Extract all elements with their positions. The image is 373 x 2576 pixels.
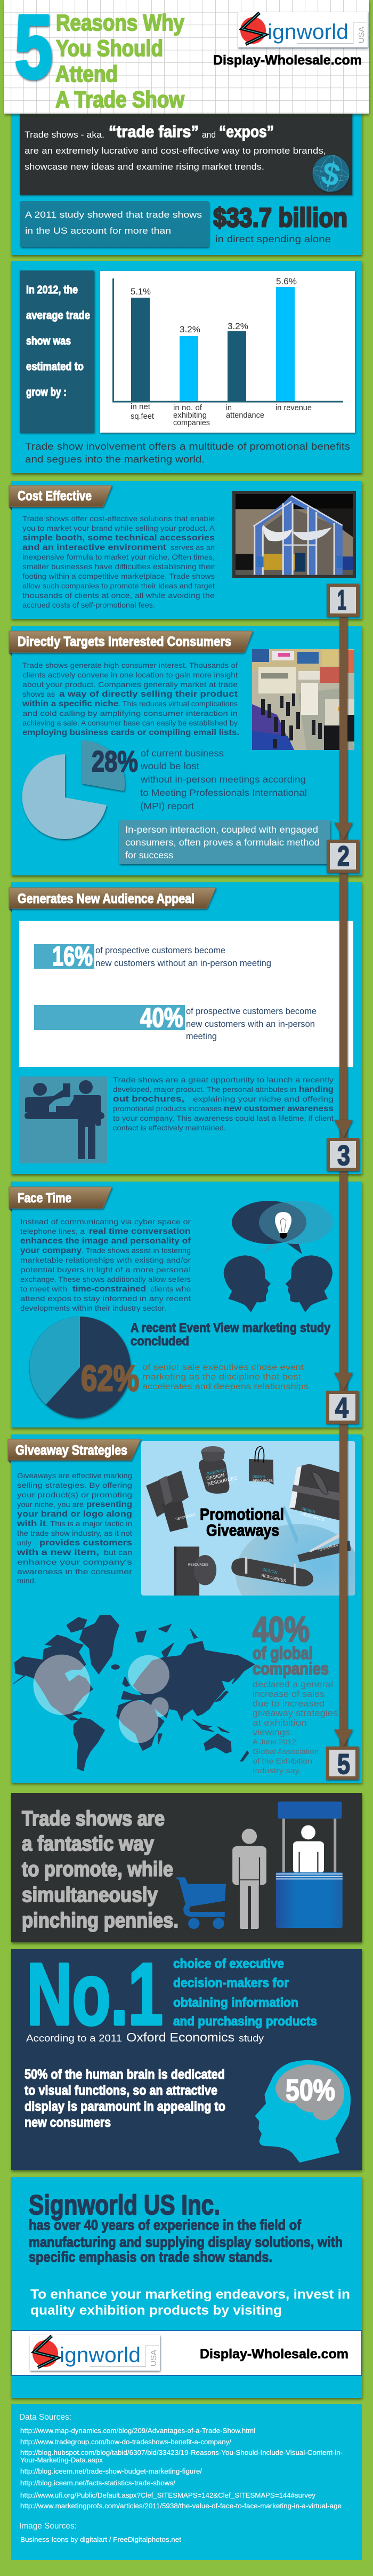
promotional giveaways label: Promotional xyxy=(200,1505,284,1524)
icon: light bulb xyxy=(275,1212,291,1239)
text: cost effective: Trade shows offer cost-effective solutions that enable xyxy=(22,514,215,523)
panel: sources xyxy=(11,2404,362,2560)
website name footer: Display-Wholesale.com xyxy=(200,2347,348,2362)
growth summary text: Trade show involvement offers a multitude of promotional benefits xyxy=(25,441,350,452)
item branding: RESOURCES xyxy=(175,1513,196,1521)
item branding: DESIGN xyxy=(206,1472,225,1481)
title text xyxy=(55,10,184,113)
text: directly targets: about your product. Companies generally market at trade xyxy=(22,680,238,689)
number marker 3: 3 xyxy=(337,1140,350,1171)
pinching pennies heading: Trade shows are xyxy=(22,1807,165,1830)
stat: 40 percent of global companies: viewings xyxy=(253,1727,290,1737)
text: giveaway strategies: . This is a major tactic in xyxy=(46,1519,132,1528)
text: cost effective: footing within a competitive marketplace. Trade shows xyxy=(22,572,215,580)
globe backdrop xyxy=(236,1524,355,1596)
promo item: notebook and disc xyxy=(174,1546,216,1597)
company heading: Signworld US Inc. xyxy=(29,2190,220,2221)
bar chart: 5.6% xyxy=(276,276,297,286)
bar: 40 percent: meeting xyxy=(186,1032,217,1041)
icon: dollar globe: $ xyxy=(318,155,344,194)
number marker 2: 2 xyxy=(337,841,350,872)
brain fact text: 50% of the human brain is dedicated xyxy=(25,2067,225,2082)
stat: No.1: No.1 xyxy=(27,1945,163,2043)
pinching pennies heading: simultaneously xyxy=(22,1884,158,1907)
growth heading box: grow by : xyxy=(26,386,67,398)
icon: visitor figure xyxy=(232,1829,266,1929)
promo item: bag xyxy=(249,1447,273,1485)
stat: 40 percent of global companies: increase of sales xyxy=(253,1689,325,1699)
intro dark box: showcase new ideas and examine rising market trends. xyxy=(25,162,264,172)
text: face time: attend expos to stay informed in any recent xyxy=(20,1294,191,1303)
number marker 4 xyxy=(326,1391,359,1424)
text: directly targets: within a specific niche xyxy=(22,699,118,708)
number marker 1: 1 xyxy=(337,585,346,616)
photo: exhibition booth xyxy=(232,491,356,578)
logo: Signworld USA: USA xyxy=(357,27,366,43)
stat: 33.7 billion xyxy=(213,203,347,244)
study heading xyxy=(131,1321,331,1349)
item branding: RESOURCES xyxy=(261,1573,287,1583)
stat: 28 percent lost: would be lost xyxy=(140,761,199,771)
text: face time: telephone lines, a xyxy=(20,1227,85,1235)
text: giveaway strategies: presenting xyxy=(86,1500,132,1509)
arrow to 2 xyxy=(334,823,353,839)
stat: 62 percent: 62% xyxy=(81,1358,139,1399)
text: cost effective: allow such companies to promote their ideas and target xyxy=(22,581,215,590)
text: directly targets: employing business cards or compiling email lists. xyxy=(22,728,239,737)
stat: 40 percent of global companies: declared a general xyxy=(253,1679,333,1689)
text: directly targets: clients actively convene in one location to gain more insight xyxy=(22,671,238,679)
icon: dollar globe xyxy=(312,154,350,194)
item branding: GRAPHIC xyxy=(206,1468,226,1477)
intro dark box: and xyxy=(202,130,216,140)
Oxford Economics citation: Oxford Economics xyxy=(126,2030,234,2044)
text: new audience: contact is effectively maintained. xyxy=(113,1123,226,1132)
stat: 40 percent of global companies: 40% xyxy=(253,1609,310,1649)
number marker 1 xyxy=(327,584,359,617)
bar chart: sq.feet xyxy=(131,412,154,421)
text: new audience: to your company. This awareness could last a lifetime, if client xyxy=(113,1114,334,1122)
intro dark box xyxy=(20,107,352,195)
pie chart: 28 percent xyxy=(22,740,125,839)
growth summary text xyxy=(25,441,350,465)
stat: 40 percent of global companies xyxy=(253,1609,338,1775)
website name: Display-Wholesale.com xyxy=(213,53,362,68)
growth heading box: In 2012, the xyxy=(26,284,78,296)
text: face time: time-constrained xyxy=(72,1285,146,1294)
item branding: DESIGN xyxy=(301,1507,315,1514)
panel: face time xyxy=(9,1182,362,1427)
image sources: Business Icons by digitalart / FreeDigitalphotos.net xyxy=(20,2536,182,2543)
header xyxy=(4,0,369,114)
text: new audience: explaining your niche and offering xyxy=(193,1095,334,1103)
stat: 28 percent lost: without in-person meetings according xyxy=(140,774,306,785)
bar: 16 percent xyxy=(34,941,271,971)
logo: Signworld USA footer: ignworld xyxy=(60,2343,141,2367)
bar: 40 percent xyxy=(34,1002,317,1041)
text: giveaway strategies: enhance your company's xyxy=(17,1558,132,1566)
stat: 28 percent lost xyxy=(92,745,307,811)
call to action: To enhance your marketing endeavors, invest in xyxy=(30,2287,350,2302)
text: new audience: promotional products increases xyxy=(113,1104,222,1113)
number marker 4: 4 xyxy=(335,1392,348,1424)
panel: cost effective xyxy=(9,481,362,619)
text: new audience: Trade shows are a great opportunity to launch a recently xyxy=(113,1075,334,1084)
stat: 40 percent of global companies: due to increased xyxy=(253,1698,325,1709)
bar chart: in no. of xyxy=(173,404,202,412)
promotional giveaways artwork xyxy=(141,1441,355,1596)
data sources: http://www.marketingprofs.com/articles/2011/5938/the-value-of-face-to-face-marketing-in-a-virtual-age xyxy=(20,2502,342,2510)
text: giveaway strategies: but can xyxy=(104,1548,132,1557)
text: directly targets: and cold calling by amplifying consumer interaction in xyxy=(22,709,238,717)
study heading: concluded xyxy=(131,1334,189,1349)
callout: in-person interaction xyxy=(119,820,330,864)
Oxford Economics citation: study xyxy=(239,2033,264,2044)
text: giveaway strategies: your product(s) or promoting xyxy=(17,1490,132,1499)
bar: 16 percent: new customers without an in-person meeting xyxy=(95,959,271,968)
intro dark box: “expos” xyxy=(219,122,274,141)
text: face time: real time conversation xyxy=(89,1227,191,1236)
callout: in-person interaction: consumers, often proves a formulaic method xyxy=(125,837,320,848)
text: face time: . Trade shows assist in fostering xyxy=(82,1246,191,1255)
image sources: Image Sources: xyxy=(19,2522,77,2531)
growth heading box: estimated to xyxy=(26,361,84,373)
arrow to 4 xyxy=(334,1373,353,1390)
ribbon heading: cost effective: Cost Effective xyxy=(18,489,92,504)
bar: 16 percent: 16% xyxy=(52,941,93,971)
title text: Attend xyxy=(55,61,118,87)
text: cost effective: thousands of clients at once, all while avoiding the xyxy=(22,591,215,600)
icon: head with brain 50 percent xyxy=(255,2060,351,2163)
text: face time: exchange. These shows additionally allow sellers xyxy=(20,1275,191,1283)
number marker 3 xyxy=(327,1138,359,1171)
ribbon heading: face time: Face Time xyxy=(18,1191,71,1206)
Oxford Economics citation: According to a 2011 xyxy=(26,2033,122,2044)
promotional giveaways label xyxy=(200,1505,284,1540)
promo item: bottle xyxy=(199,1446,229,1494)
item branding: DESIGN xyxy=(262,1567,278,1575)
item branding xyxy=(175,1468,338,1583)
Oxford Economics citation xyxy=(26,2030,264,2044)
pinching pennies heading: a fantastic way xyxy=(22,1832,154,1855)
panel: directly targets interested consumers xyxy=(9,626,362,875)
stat: 28 percent lost: 28% xyxy=(92,745,138,778)
icon: head with brain 50 percent: 50% xyxy=(286,2073,335,2107)
panel: pinching pennies xyxy=(11,1793,362,1942)
bar chart: companies xyxy=(173,419,210,427)
text: face time xyxy=(20,1217,191,1312)
stat: 40 percent of global companies: Industry say. xyxy=(253,1766,301,1775)
ribbon heading: giveaway strategies xyxy=(8,1439,141,1464)
image sources xyxy=(19,2522,182,2543)
bar chart: in revenue xyxy=(275,404,312,412)
item branding: DESIGN xyxy=(253,1476,265,1479)
data sources: http://www.tradegroup.com/how-do-tradeshows-benefit-a-company/ xyxy=(20,2438,232,2446)
data sources: http://blog.hubspot.com/blog/tabid/6307/bid/33423/19-Reasons-You-Should-Include-Visual-Content-in- xyxy=(20,2449,343,2457)
text: giveaway strategies: your niche, you are xyxy=(17,1500,84,1509)
stat: 28 percent lost: (MPI) report xyxy=(140,801,194,811)
logo: Signworld USA footer xyxy=(30,2335,160,2371)
pinching pennies heading xyxy=(22,1807,179,1932)
bar chart: in xyxy=(226,404,232,412)
panel: 2012 growth xyxy=(11,261,362,473)
water stream xyxy=(282,1505,298,1544)
logo: Signworld USA footer: USA xyxy=(149,2350,158,2366)
pinching pennies heading: to promote, while xyxy=(22,1858,173,1881)
text: cost effective: simple booth, some technical accessories xyxy=(22,533,215,543)
text: cost effective: smaller businesses have difficulties establishing their xyxy=(22,562,215,571)
text: cost effective: inexpensive formula to market your niche. Often times, xyxy=(22,553,215,561)
item branding: RESOURCES xyxy=(301,1512,325,1522)
text: face time: developments within their industry sector. xyxy=(20,1304,166,1312)
bar chart: in net xyxy=(131,403,150,411)
data sources xyxy=(19,2413,343,2510)
text: directly targets: a way of directly selling their product xyxy=(59,690,238,699)
text: giveaway strategies: Giveaways are effective marking xyxy=(17,1471,132,1480)
text: cost effective xyxy=(22,514,215,609)
stat: 62 percent xyxy=(81,1358,309,1399)
text: face time: potential buyers in light of a more personal xyxy=(20,1265,191,1274)
ribbon heading: face time xyxy=(9,1187,112,1212)
text: face time: enhances the image and personality of xyxy=(20,1237,191,1246)
ribbon heading: new audience: Generates New Audience Appeal xyxy=(18,891,194,906)
promo item: gift box xyxy=(289,1464,339,1520)
bar: 40 percent: new customers with an in-person xyxy=(186,1019,315,1029)
text: new audience: handing xyxy=(299,1085,334,1094)
company heading: has over 40 years of experience in the field of xyxy=(29,2217,302,2233)
brain fact text: to visual functions, so an attractive xyxy=(25,2083,217,2098)
study heading: A recent Event View marketing study xyxy=(131,1321,331,1335)
stat: 40 percent of global companies: of the Exhibition xyxy=(253,1757,312,1765)
ribbon heading: new audience xyxy=(9,888,216,912)
brain fact text xyxy=(25,2067,225,2130)
No.1 description xyxy=(173,1957,317,2029)
panel: number one choice xyxy=(11,1945,362,2170)
website strip xyxy=(11,2331,362,2375)
text: face time: clients who xyxy=(150,1285,191,1293)
bar: 40 percent: 40% xyxy=(140,1002,183,1033)
bar: 40 percent: of prospective customers become xyxy=(186,1007,317,1016)
text: directly targets: shows as xyxy=(22,690,55,698)
bar chart: 3.2% xyxy=(180,324,200,334)
text: cost effective: you to market your brand while selling your product. A xyxy=(22,524,215,532)
promotional giveaways label: Giveaways xyxy=(206,1521,279,1540)
stat: 40 percent of global companies: of global xyxy=(253,1644,313,1663)
arrow to 5 xyxy=(334,1729,353,1746)
numbered timeline post and arrows xyxy=(334,617,353,1746)
promo item: skateboard xyxy=(231,1557,313,1586)
brain fact text: new consumers xyxy=(25,2115,111,2130)
text: giveaway strategies: your brand or logo along xyxy=(17,1510,132,1519)
text: directly targets: Trade shows generate high consumer interest. Thousands of xyxy=(22,661,238,669)
arrow to 3 xyxy=(334,1120,353,1137)
text: cost effective: serves as an xyxy=(171,543,215,552)
text: giveaway strategies xyxy=(17,1471,132,1585)
item branding: RESOURCES xyxy=(188,1564,208,1567)
number marker 2 xyxy=(327,840,359,873)
data sources: Data Sources: xyxy=(19,2413,71,2422)
bar chart xyxy=(100,271,355,433)
intro dark box: are an extremely lucrative and cost-effective way to promote brands, xyxy=(25,146,326,156)
title text: You Should xyxy=(56,36,163,61)
ribbon heading: directly targets: Directly Targets Interested Consumers xyxy=(18,634,231,649)
growth summary text: and segues into the marketing world. xyxy=(25,453,205,465)
stat: 33.7 billion: $33.7 billion xyxy=(213,203,347,233)
title text: Reasons Why xyxy=(56,10,184,36)
comparison chart xyxy=(19,921,353,1067)
data sources: http://blog.iceem.net/trade-show-budget-marketing-figure/ xyxy=(20,2468,202,2475)
text: giveaway strategies: mind. xyxy=(17,1576,36,1585)
text: giveaway strategies: selling strategies. By offering xyxy=(17,1481,132,1489)
text: face time: your company xyxy=(20,1246,82,1255)
ribbon heading: cost effective xyxy=(9,485,112,511)
text: giveaway strategies: the trade show industry, as it not xyxy=(17,1529,132,1537)
stat: 62 percent: of senior sale executives chose event xyxy=(142,1363,304,1372)
stat: 40 percent of global companies: at exhibition xyxy=(253,1718,307,1728)
text: cost effective: accrued costs of self-promotional fees. xyxy=(22,601,155,609)
number marker 5: 5 xyxy=(337,1749,350,1780)
logo: Signworld USA: ignworld xyxy=(267,20,348,44)
call to action: quality exhibition products by visiting xyxy=(30,2303,282,2318)
text: cost effective: and an interactive environment xyxy=(22,543,166,552)
logo: Signworld USA xyxy=(238,12,368,47)
stat: 62 percent: marketing as the discipline that best xyxy=(142,1373,302,1382)
panel: Signworld company xyxy=(11,2177,362,2398)
ribbon heading: directly targets xyxy=(9,631,253,656)
stat: 62 percent: accelerates and deepens relationships xyxy=(142,1382,309,1391)
stat: 28 percent lost: to Meeting Professionals International xyxy=(140,787,307,798)
growth heading box: average trade xyxy=(26,309,90,322)
text: new audience: out brochures, xyxy=(113,1095,184,1104)
call to action xyxy=(30,2287,350,2318)
growth heading box: show was xyxy=(26,335,71,347)
icon: exhibition stand xyxy=(276,1801,343,1928)
callout: 2011 study xyxy=(20,201,209,247)
panel: giveaway strategies xyxy=(8,1434,362,1783)
company heading: specific emphasis on trade show stands. xyxy=(29,2249,272,2265)
data sources: http://www.map-dynamics.com/blog/209/Advantages-of-a-Trade-Show.html xyxy=(20,2427,255,2435)
callout: 2011 study: A 2011 study showed that trade shows xyxy=(25,210,202,220)
item branding: RESOURCES xyxy=(253,1480,273,1483)
text: new audience xyxy=(113,1075,334,1132)
number marker 5 xyxy=(326,1746,359,1780)
icon: people exchanging brochure xyxy=(19,1076,107,1163)
icon: shopping cart xyxy=(176,1877,226,1929)
callout: in-person interaction: In-person interaction, coupled with engaged xyxy=(125,824,318,835)
text: face time: to meet with xyxy=(20,1285,67,1293)
bar chart: exhibiting xyxy=(173,411,207,420)
data sources: Your-Marketing-Data.aspx xyxy=(20,2457,103,2464)
No.1 description: decision-makers for xyxy=(173,1976,289,1990)
item branding: RESOURCES xyxy=(207,1475,238,1487)
stat: 40 percent of global companies: giveaway strategies xyxy=(253,1708,338,1718)
stat: 40 percent of global companies: companies xyxy=(253,1659,329,1678)
text: directly targets: . This reduces virtual complications xyxy=(118,699,238,708)
text: face time: Instead of communicating via cyber space or xyxy=(20,1217,191,1226)
brain fact text: display is paramount in appealing to xyxy=(25,2099,225,2114)
text: directly targets: achieving a sale. A consumer base can easily be established by xyxy=(22,719,238,727)
promo item: wallet xyxy=(146,1471,189,1532)
callout: 2011 study: in the US account for more than xyxy=(25,226,171,236)
text: new audience: new customer awareness xyxy=(224,1104,334,1113)
No.1 description: choice of executive xyxy=(173,1957,284,1971)
bar chart: 3.2% xyxy=(228,321,248,331)
text: directly targets xyxy=(22,661,239,737)
text: giveaway strategies: only xyxy=(17,1538,31,1547)
stat: 33.7 billion: in direct spending alone xyxy=(215,234,331,244)
bar chart: attendance xyxy=(226,411,264,420)
intro dark box: Trade shows - aka. xyxy=(25,130,104,140)
text: giveaway strategies: with a new item, xyxy=(17,1548,99,1557)
stat: 40 percent of global companies: Global Association xyxy=(253,1747,319,1756)
world map xyxy=(13,1615,255,1771)
pie chart: 62 percent xyxy=(29,1317,131,1418)
growth heading box xyxy=(20,270,94,433)
text: face time: marketable relationships with existing and/or xyxy=(20,1256,191,1264)
panel: introduction xyxy=(11,107,362,255)
data sources: http://blog.iceem.net/facts-statistics-trade-shows/ xyxy=(20,2479,176,2487)
icon: two heads sharing an idea xyxy=(224,1201,333,1312)
panel: generates new audience appeal xyxy=(9,882,362,1174)
pinching pennies heading: pinching pennies. xyxy=(22,1909,179,1932)
text: giveaway strategies: awareness in the consumer xyxy=(17,1567,132,1576)
stat: 40 percent of global companies: A June 2012 xyxy=(253,1737,296,1746)
intro dark box: “trade fairs” xyxy=(109,122,199,141)
ribbon heading: giveaway strategies: Giveaway Strategies xyxy=(15,1443,127,1458)
promo item: pens xyxy=(297,1533,351,1562)
item branding: RESOURCES xyxy=(318,1544,338,1552)
data sources: http://www.ufi.org/Public/Default.aspx?Clef_SITESMAPS=142&Clef_SITESMAPS=144#survey xyxy=(20,2492,316,2499)
No.1 description: obtaining information xyxy=(173,1996,298,2010)
text: giveaway strategies: provides customers xyxy=(39,1538,132,1548)
text: new audience: developed, major product. The personal attributes in xyxy=(113,1085,296,1094)
No.1 description: and purchasing products xyxy=(173,2014,317,2029)
title text: A Trade Show xyxy=(55,87,184,113)
stat: 28 percent lost: of current business xyxy=(141,748,224,759)
text: giveaway strategies: with it xyxy=(17,1519,46,1528)
photo: trade show floor crowd xyxy=(252,649,354,750)
company heading xyxy=(29,2190,343,2265)
callout: in-person interaction: for success xyxy=(125,850,173,860)
bar: 16 percent: of prospective customers become xyxy=(95,946,225,955)
bar chart: 5.1% xyxy=(131,286,151,297)
